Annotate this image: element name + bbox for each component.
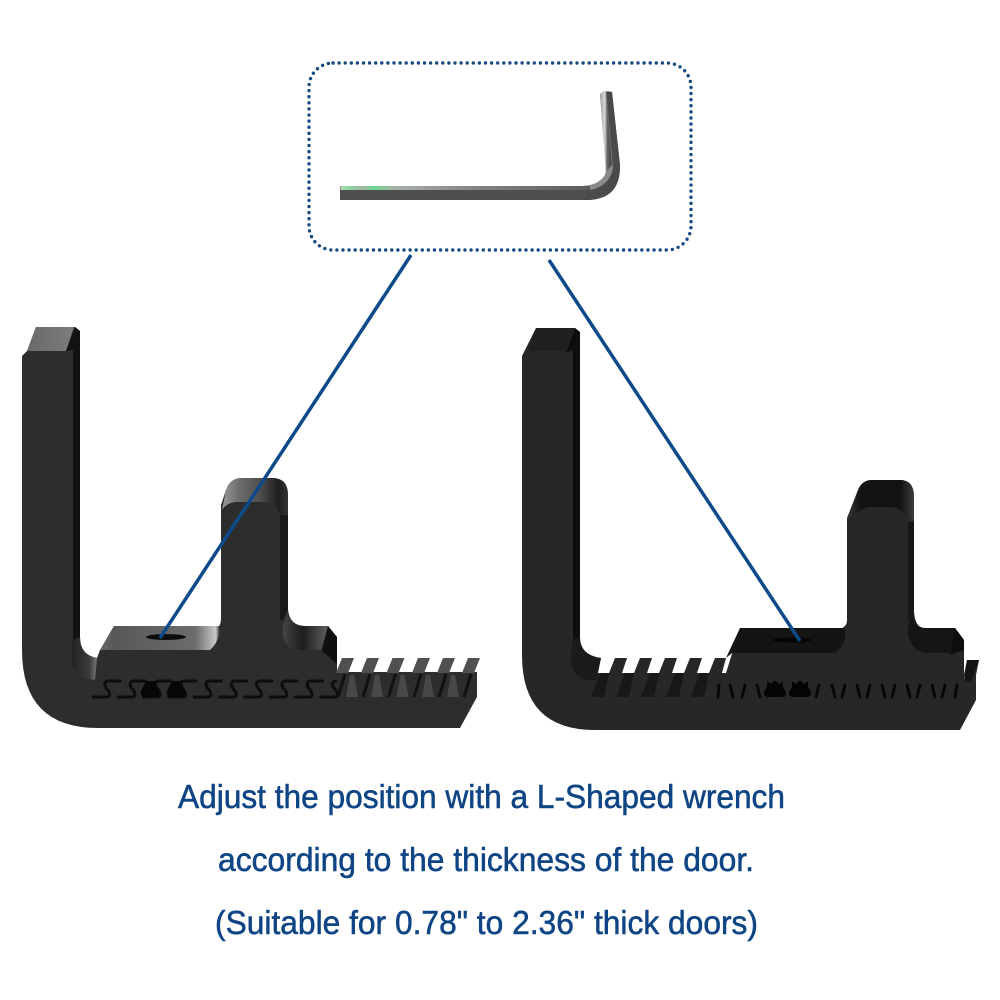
caption line 1: Adjust the position with a L-Shaped wrench <box>178 779 785 816</box>
top face of the long arm <box>27 327 74 351</box>
keyhole openings <box>764 681 811 697</box>
right side of the upright post <box>280 515 288 620</box>
adjustment screw hole <box>773 638 811 642</box>
top face of the right wing <box>283 610 328 650</box>
icon: L-shaped hex wrench <box>340 91 620 200</box>
top face of the left wing <box>726 628 845 658</box>
keyhole openings <box>141 681 185 697</box>
bracket: left, wide door position <box>22 327 480 728</box>
arrow: leader line to right screw hole <box>549 260 800 641</box>
inner corner fillet <box>571 637 601 680</box>
top face of the left wing <box>100 626 219 650</box>
dotted callout box containing the wrench <box>309 63 691 250</box>
top face of the long arm <box>528 328 574 351</box>
bracket body silhouette <box>522 328 979 730</box>
arrow: leader line to left screw hole <box>160 255 411 638</box>
inner corner fillet <box>72 637 97 680</box>
interlocking serpentine slots <box>93 681 337 697</box>
adjustment screw hole <box>146 634 186 640</box>
right wing chamfer <box>322 626 337 664</box>
bracket body silhouette <box>22 327 477 728</box>
chamfer of the long arm <box>566 328 580 640</box>
top face of the upright post <box>222 478 288 520</box>
caption text block <box>178 779 785 942</box>
right wing chamfer <box>950 628 964 655</box>
top face of the right wing <box>908 612 955 653</box>
top face of the upright post <box>847 480 914 525</box>
rack teeth <box>336 658 480 697</box>
caption line 2: according to the thickness of the door. <box>218 842 754 879</box>
thin rack slits <box>718 685 957 697</box>
chamfer of the long arm <box>66 327 80 640</box>
right side of the upright post <box>908 522 914 620</box>
caption line 3: (Suitable for 0.78" to 2.36" thick doors) <box>215 905 758 942</box>
rack teeth <box>591 658 979 697</box>
bracket: right, narrow door position <box>522 328 979 730</box>
